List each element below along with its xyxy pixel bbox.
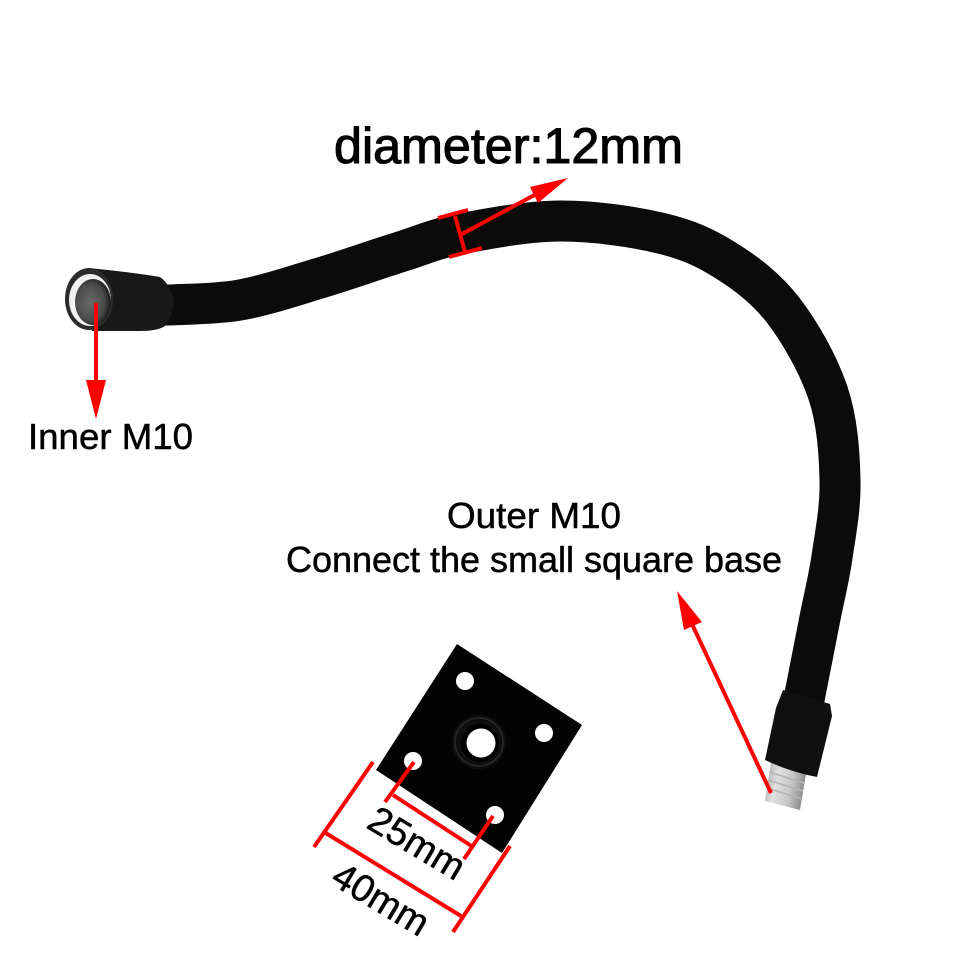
dimension 25mm (385, 762, 493, 859)
left collar (88, 268, 174, 331)
arrow: outer M10 (677, 591, 771, 793)
title: diameter: diameter:12mm (334, 118, 683, 174)
tube opening (65, 268, 113, 330)
label: 25mm: 25mm (360, 799, 473, 889)
bottom collar (765, 690, 832, 777)
centre boss (452, 715, 506, 769)
label: outer M10: Outer M10 (447, 495, 621, 536)
threaded outer M10 end (765, 762, 806, 810)
square base plate (376, 644, 582, 853)
diameter marker and arrow (438, 178, 568, 257)
flexible tube body (150, 221, 840, 720)
arrow: inner M10 (86, 303, 106, 419)
label: 40mm: 40mm (324, 855, 437, 945)
label: connect base: Connect the small square base (286, 539, 782, 580)
label: inner M10: Inner M10 (28, 416, 193, 457)
gooseneck tube (65, 221, 840, 810)
mounting holes (404, 672, 553, 824)
dimension 40mm (314, 762, 510, 932)
